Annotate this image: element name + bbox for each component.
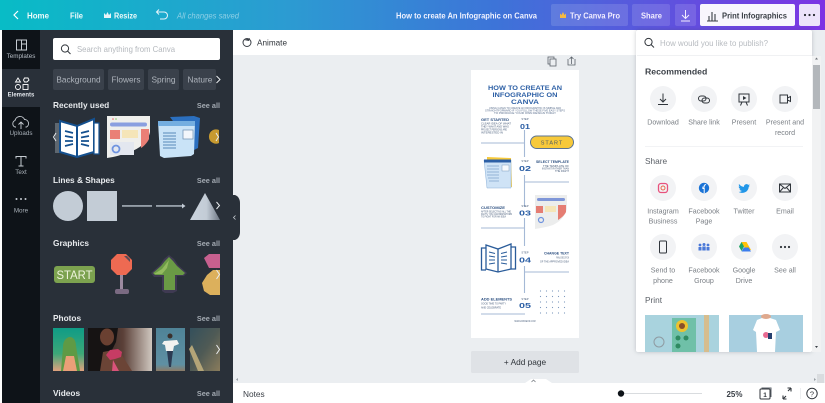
section: recently used (53, 100, 220, 158)
option: email (772, 175, 798, 216)
bottom status bar: 25% (726, 390, 743, 399)
zoom slider (618, 390, 702, 397)
step 01: INTERESTED IN (481, 132, 503, 134)
option: google drive (731, 234, 757, 285)
rail item: uploads: Uploads (9, 130, 33, 137)
step 03: CUSTOMIZE (481, 206, 506, 210)
help icon: ? (810, 390, 814, 398)
share section (645, 156, 798, 285)
step 01: THEY WANT AND WHO (481, 126, 509, 128)
help icon (807, 388, 817, 399)
keyword chips (53, 69, 220, 90)
option: google drive: Drive (736, 277, 752, 285)
book icon (55, 119, 99, 157)
section: recently used: Recently used (53, 100, 109, 110)
step 02: THE RIGHT (555, 170, 570, 173)
section: photos: Photos (53, 313, 82, 323)
infographic page (471, 70, 579, 338)
step 04: FINAL EXECUTION (556, 256, 569, 260)
option: facebook page (688, 175, 720, 226)
option: present and record: record (775, 129, 795, 137)
infographic intro text: TO PRODUCE YOUR OWN DESIGN TODAY (494, 112, 557, 115)
step 04 (519, 250, 570, 264)
step 05 (481, 297, 531, 310)
rail item: templates (7, 40, 35, 60)
step 05: ADD ELEMENTS (481, 298, 513, 302)
rail item: more (14, 198, 29, 214)
pixel gem and coin partial (202, 254, 220, 295)
step 01: 01 (520, 122, 530, 131)
section: photos (53, 313, 220, 371)
top navigation bar: All changes saved (176, 10, 239, 20)
panel scrollbar (812, 56, 821, 352)
option: see all (772, 234, 798, 274)
step 01 (481, 117, 530, 134)
option: twitter: Twitter (734, 208, 755, 216)
add page button: + Add page (504, 357, 546, 367)
open book icon on page (482, 244, 516, 272)
pixel green arrow (151, 255, 187, 293)
step 02: SELECT TEMPLATE (536, 160, 570, 164)
web layout illustration on page (535, 195, 567, 229)
rail item: templates: Templates (7, 53, 35, 60)
option: present: Present (732, 118, 756, 126)
option: facebook group: Group (694, 277, 714, 285)
photo: denim partial (189, 328, 220, 371)
option: facebook group (688, 234, 720, 285)
option: email: Email (776, 208, 794, 216)
publish search: How would you like to publish? (660, 39, 768, 48)
option: present and record (766, 86, 804, 137)
print thumbnail: notebook (645, 315, 719, 352)
search box: Search anything from Canva (77, 44, 175, 54)
document illustration (484, 157, 512, 188)
photo: woman on green (53, 328, 84, 371)
web layout illustration (107, 116, 150, 158)
add page button (471, 351, 579, 373)
option: send to phone: Send to (651, 266, 675, 274)
top navigation bar (0, 0, 825, 30)
section: videos: See all (197, 389, 220, 398)
step 02: STEP (521, 159, 529, 163)
step 03: TO FIGHT FOR AN IDEA (481, 216, 506, 218)
elements side panel (40, 30, 240, 403)
start button (530, 136, 574, 148)
step 01: PROJECT PERSONS ARE (481, 128, 507, 132)
canvas background (233, 30, 825, 383)
horizontal scrollbar (236, 374, 824, 383)
step 04: STEP (521, 250, 529, 254)
option: download: Download (647, 118, 679, 126)
option: facebook page: Facebook (688, 208, 720, 216)
search box (53, 38, 220, 60)
step 03: FACTS, YOU CAN BRAINSTORM (481, 213, 512, 216)
option: present (731, 86, 757, 126)
infographic intro text: STRAIGHTFORWARD IF YOU FOLLOW THESE FIVE EASY STEPS (485, 110, 565, 112)
recommended section: Recommended (645, 66, 707, 76)
page count icon (760, 388, 771, 399)
print section: Print (645, 295, 663, 305)
section: graphics (53, 238, 220, 295)
print thumbnail: t-shirt (729, 314, 803, 352)
pixel stop sign (111, 254, 132, 294)
connector lines (481, 130, 569, 314)
rail item: more: More (14, 208, 29, 214)
step 02: THE TEMPLATE OF (543, 165, 570, 168)
step 01: GET STARTED (481, 118, 509, 122)
step 01: CLEAR IDEA OF WHAT (481, 122, 512, 126)
step 05: 05 (519, 301, 531, 310)
step 02 (519, 159, 570, 173)
photo: dancer on blue (156, 328, 185, 371)
page footer url: MANGOVIDEOS.COM (514, 319, 536, 323)
step 03: 03 (519, 208, 531, 218)
infographic title: INFOGRAPHIC ON (492, 92, 558, 99)
option: share link (688, 86, 720, 126)
publish dropdown panel (636, 30, 821, 352)
step 01: STEP (521, 117, 529, 121)
section: recently used: See all (197, 101, 220, 110)
option: present and record: Present and (766, 118, 804, 126)
step 02: INSTANT RATHER THAN (542, 168, 569, 170)
section: videos (53, 388, 220, 398)
rail item: elements (8, 78, 35, 98)
step 04: 04 (519, 256, 532, 264)
print section (645, 295, 803, 352)
step 04: CHANGE TEXT (544, 252, 570, 256)
option: twitter (731, 175, 757, 216)
keyword chips: Nature (188, 74, 213, 84)
section: graphics: Graphics (53, 238, 89, 248)
dot grid (540, 290, 565, 314)
photo: woman with flowers (88, 328, 152, 371)
section: lines and shapes: Lines & Shapes (53, 175, 115, 185)
option: see all: See all (774, 266, 796, 274)
top navigation bar: Resize (114, 10, 137, 20)
option: instagram: Business (649, 218, 678, 226)
section: lines and shapes: See all (197, 176, 220, 185)
top navigation bar: Share (641, 10, 662, 20)
bottom status bar: Notes (243, 389, 265, 399)
step 03: AFTER SELECTING ALL THE (481, 210, 511, 214)
step 03 (481, 204, 531, 218)
step 05: GOOD TIME TO PARTY (481, 302, 506, 306)
step 02: 02 (519, 164, 531, 173)
page action icons (548, 57, 575, 66)
browser window illustration (158, 116, 200, 158)
infographic title: CANVA (511, 99, 540, 106)
keyword chips: Flowers (111, 74, 141, 84)
rail item: text (15, 156, 27, 176)
infographic title (488, 85, 563, 106)
start button: START (541, 140, 563, 146)
gold coin partial (209, 129, 219, 144)
step 03: STEP (521, 204, 529, 208)
pixel start button (54, 266, 95, 283)
top navigation bar: Try Canva Pro (570, 10, 620, 20)
keyword chips: Background (56, 74, 101, 84)
section: videos: Videos (53, 388, 80, 398)
infographic title: HOW TO CREATE AN (488, 85, 563, 92)
fullscreen icon (783, 388, 791, 399)
option: download (647, 86, 679, 126)
step 05: AND CELEBRATE (481, 306, 501, 310)
section: lines and shapes (53, 175, 220, 221)
rail item: uploads (9, 116, 33, 137)
pixel start button: START (56, 270, 92, 282)
top navigation bar: How to create An Infographic on Canva (396, 12, 537, 20)
top navigation bar: File (70, 10, 83, 20)
infographic intro text (485, 107, 565, 115)
option: facebook group: Facebook (688, 266, 720, 274)
bottom status bar (233, 379, 825, 403)
animate toolbar (233, 30, 636, 55)
page count icon: 1 (763, 392, 767, 399)
rail item: elements: Elements (8, 92, 35, 98)
step 04: OF THE APPROVED IDEA (540, 260, 569, 264)
section: photos: See all (197, 314, 220, 323)
top navigation bar: Print Infographics (722, 10, 787, 20)
infographic intro text: USING CANVA TO CREATE AN INFOGRAPHIC IS SIMPLE AND (489, 107, 561, 110)
option: share link: Share link (688, 118, 720, 126)
top navigation bar: Home (27, 10, 49, 20)
option: send to phone (650, 234, 676, 285)
animate toolbar: Animate (257, 38, 287, 48)
option: facebook page: Page (696, 218, 712, 226)
option: send to phone: phone (653, 277, 673, 285)
left icon rail (0, 30, 40, 403)
section: graphics: See all (197, 239, 220, 248)
option: instagram (647, 175, 679, 226)
rail item: text: Text (15, 169, 27, 176)
option: instagram: Instagram (647, 208, 679, 216)
keyword chips: Spring (152, 74, 176, 84)
recommended section (645, 66, 804, 137)
share section: Share (645, 156, 668, 166)
step 05: STEP (521, 297, 529, 301)
option: google drive: Google (733, 266, 755, 274)
